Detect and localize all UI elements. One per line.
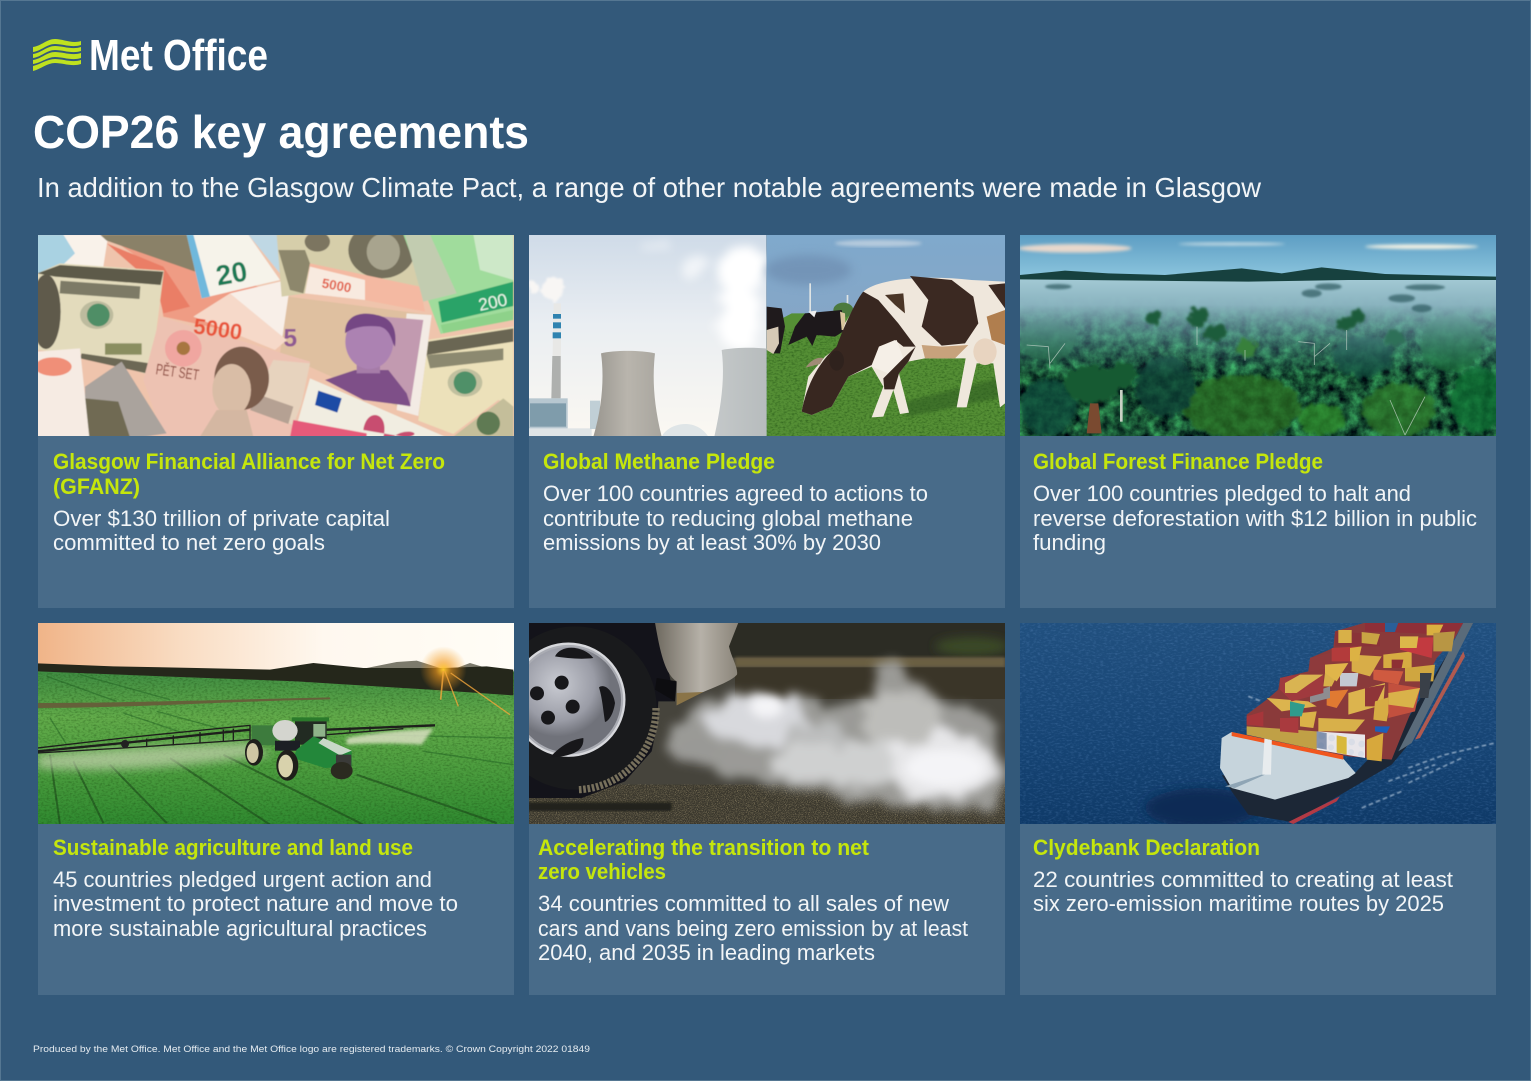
body text: six zero-emission maritime routes by 2025 [1033, 891, 1444, 916]
photo: misty rainforest [1018, 235, 1505, 438]
panel: Global Methane Pledge [528, 235, 1005, 608]
body text: Over 100 countries pledged to halt and [1033, 481, 1411, 506]
body text: funding [1033, 530, 1106, 555]
photo: banknotes: 5000 [321, 276, 353, 296]
heading: zero vehicles [538, 859, 666, 884]
body text: more sustainable agricultural practices [53, 916, 427, 941]
photo: banknotes: 20 [214, 256, 250, 292]
subtitle: In addition to the Glasgow Climate Pact, a range of other notable agreements were made in Glasgow [37, 172, 1262, 203]
heading [53, 449, 445, 499]
heading: Global Forest Finance Pledge [1033, 449, 1323, 474]
body text: 45 countries pledged urgent action and [53, 867, 432, 892]
photo: banknotes: PĚT SET [155, 361, 200, 384]
body text: emissions by at least 30% by 2030 [543, 530, 881, 555]
panel: Glasgow Financial Alliance for Net Zero [30, 222, 530, 608]
logo wordmark: Met Office [89, 31, 268, 80]
body text [1033, 867, 1454, 916]
body text [538, 891, 969, 965]
heading: Global Methane Pledge [543, 449, 775, 474]
photo: power station and cows [528, 235, 1005, 437]
photo: banknotes [38, 235, 514, 436]
photo: car exhaust fumes [493, 623, 1008, 825]
body text: Over 100 countries agreed to actions to [543, 481, 928, 506]
body text: 22 countries committed to creating at least [1033, 867, 1454, 892]
heading: Sustainable agriculture and land use [53, 835, 413, 860]
body text: Over $130 trillion of private capital [53, 506, 390, 531]
body text [1033, 481, 1477, 555]
photo: banknotes: 5 [283, 326, 297, 353]
title: COP26 key agreements [33, 106, 529, 158]
heading: Glasgow Financial Alliance for Net Zero [53, 449, 445, 474]
body text: contribute to reducing global methane [543, 506, 913, 531]
heading: Clydebank Declaration [1033, 835, 1260, 860]
body text [543, 481, 928, 555]
panel: Accelerating the transition to net zero vehicles [493, 623, 1008, 995]
body text: cars and vans being zero emission by at least [538, 916, 969, 941]
panel: Global Forest Finance Pledge [1018, 235, 1505, 608]
heading: (GFANZ) [53, 474, 140, 499]
photo: tractor spraying a field [37, 623, 514, 825]
heading [538, 835, 870, 884]
footer credit: Produced by the Met Office. Met Office and the Met Office logo are registered trademarks. © Crown Copyright 2022 01849 [33, 1044, 590, 1055]
body text: committed to net zero goals [53, 530, 325, 555]
body text: investment to protect nature and move to [53, 891, 458, 916]
icon: wave bands [33, 39, 81, 71]
panel: Clydebank Declaration [1020, 623, 1497, 995]
heading: Accelerating the transition to net [538, 835, 870, 860]
body text: 34 countries committed to all sales of new [538, 891, 950, 916]
photo: banknotes: 5000 [192, 313, 244, 345]
panel: Sustainable agriculture and land use [37, 623, 514, 995]
photo: container ship at sea [1020, 623, 1497, 828]
body text: reverse deforestation with $12 billion in public [1033, 506, 1477, 531]
body text [53, 867, 458, 941]
logo: Met Office [33, 31, 268, 80]
body text [53, 506, 390, 555]
photo: banknotes: 200 [477, 289, 509, 315]
body text: 2040, and 2035 in leading markets [538, 940, 875, 965]
